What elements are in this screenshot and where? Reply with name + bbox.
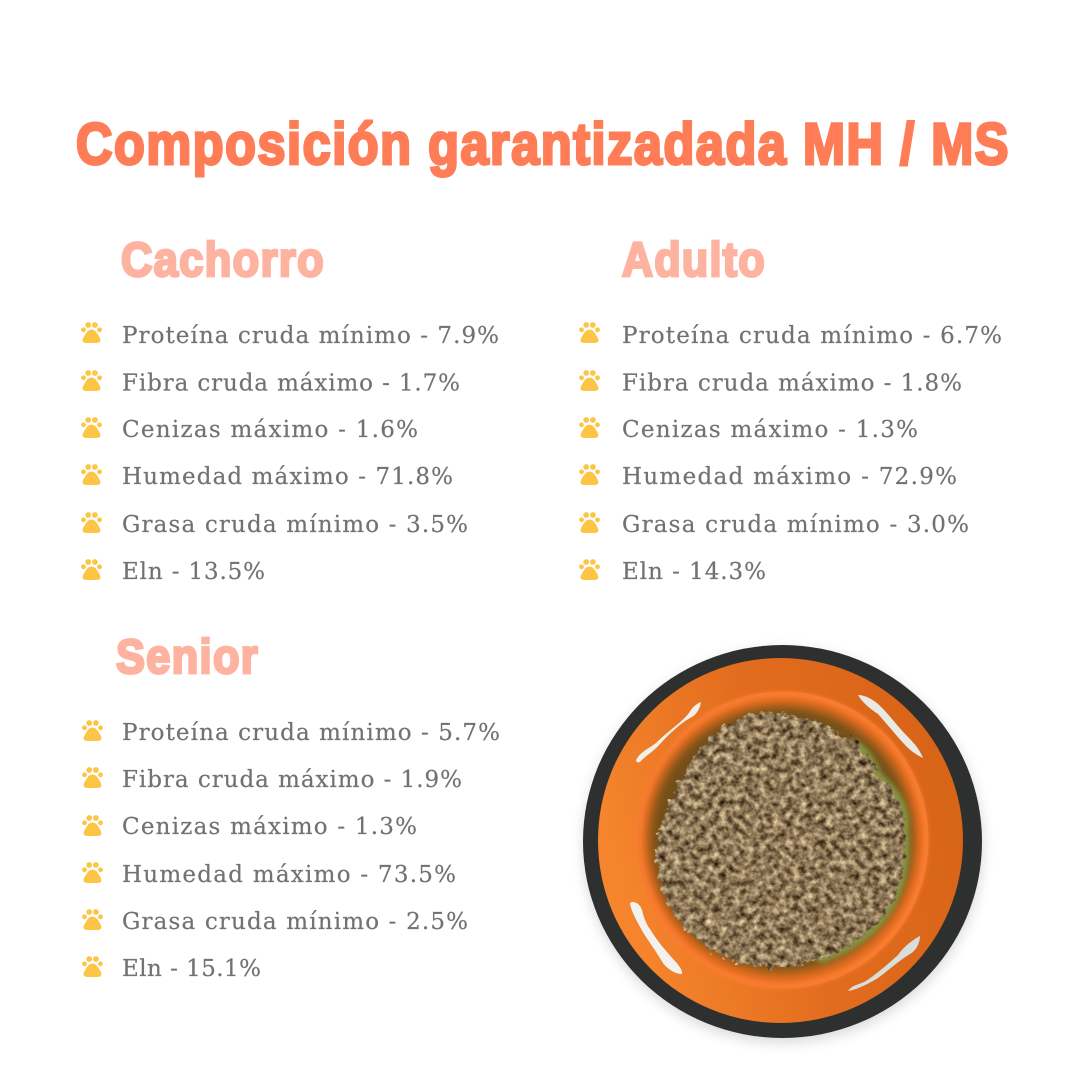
bowl outer dark rim [583,645,982,1038]
item: cenizas adulto: Cenizas máximo - 1.3% [622,417,918,443]
item: eln senior: Eln - 15.1% [122,956,261,982]
item: proteína cachorro: Proteína cruda mínimo - 7.9% [122,323,499,349]
item: fibra cachorro: Fibra cruda máximo - 1.7% [122,370,460,396]
item: eln adulto: Eln - 14.3% [622,559,766,585]
item: proteína senior: Proteína cruda mínimo - 5.7% [122,720,500,746]
bone: bottom right [848,936,920,991]
item: proteína adulto: Proteína cruda mínimo - 6.7% [622,323,1002,349]
bowl well shadow around food [650,708,912,968]
panel: cachorro [81,234,499,585]
heading: senior: Senior [116,631,259,684]
item: fibra senior: Fibra cruda máximo - 1.9% [122,767,462,793]
bowl orange rim [598,658,963,1023]
bowl well bright ring [640,694,926,986]
image: dog food bowl [583,645,982,1042]
heading: cachorro: Cachorro [121,234,325,287]
bone: top right [858,695,923,758]
item: cenizas senior: Cenizas máximo - 1.3% [122,814,417,840]
item: fibra adulto: Fibra cruda máximo - 1.8% [622,370,962,396]
panel: adulto [579,234,1002,585]
item: grasa cachorro: Grasa cruda mínimo - 3.5% [122,512,468,538]
food green edge [800,738,910,963]
panel: senior [82,631,500,982]
item: grasa adulto: Grasa cruda mínimo - 3.0% [622,512,969,538]
item: cenizas cachorro: Cenizas máximo - 1.6% [122,417,418,443]
item: humedad cachorro: Humedad máximo - 71.8% [122,464,453,490]
item: grasa senior: Grasa cruda mínimo - 2.5% [122,909,468,935]
item: humedad adulto: Humedad máximo - 72.9% [622,464,957,490]
item: humedad senior: Humedad máximo - 73.5% [122,862,456,888]
food texture [657,713,905,967]
bone: bottom left [630,902,682,974]
bowl well [638,692,928,988]
item: eln cachorro: Eln - 13.5% [122,559,265,585]
bone: top left [636,702,701,762]
heading: adulto: Adulto [622,234,766,287]
